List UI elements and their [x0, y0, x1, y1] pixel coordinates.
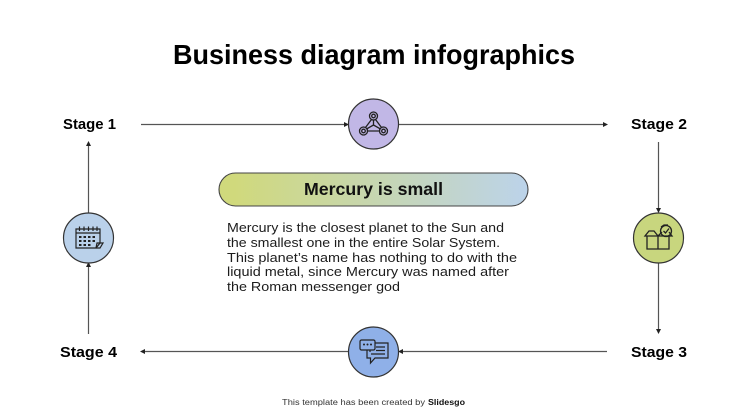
body text: This planet’s name has nothing to do with the [227, 250, 517, 265]
body text: Mercury is the closest planet to the Sun and [227, 220, 504, 235]
arrow: Stage 2 to right circle [656, 142, 661, 213]
footer credit: This template has been created by [282, 398, 425, 407]
label: Stage 2: Stage 2 [631, 116, 687, 133]
title: Business diagram infographics [173, 39, 575, 70]
heading pill [219, 173, 528, 206]
body text: the Roman messenger god [227, 279, 400, 294]
footer credit: Slidesgo [428, 398, 465, 407]
footer credit [282, 398, 465, 407]
label: Stage 3: Stage 3 [631, 344, 687, 361]
arrow: top circle to Stage 2 [398, 122, 608, 127]
body text: liquid metal, since Mercury was named after [227, 264, 510, 279]
circle icon: calendar [64, 213, 114, 263]
arrow: Stage 1 to top circle [141, 122, 349, 127]
label: Stage 4: Stage 4 [60, 344, 118, 361]
arrow: Stage 4 to left circle [86, 262, 91, 334]
body text [227, 220, 517, 294]
arrow: right circle to Stage 3 [656, 263, 661, 334]
circle icon: network [348, 99, 398, 149]
body text: the smallest one in the entire Solar System. [227, 235, 500, 250]
heading pill: Mercury is small [304, 179, 443, 199]
arrow: left circle to Stage 1 [86, 141, 91, 213]
arrow: bottom circle to Stage 4 [140, 349, 348, 354]
circle icon: box with check [634, 213, 684, 263]
label: Stage 1: Stage 1 [63, 116, 116, 133]
arrow: Stage 3 to bottom circle [398, 349, 607, 354]
circle icon: chat bubbles [348, 327, 398, 377]
